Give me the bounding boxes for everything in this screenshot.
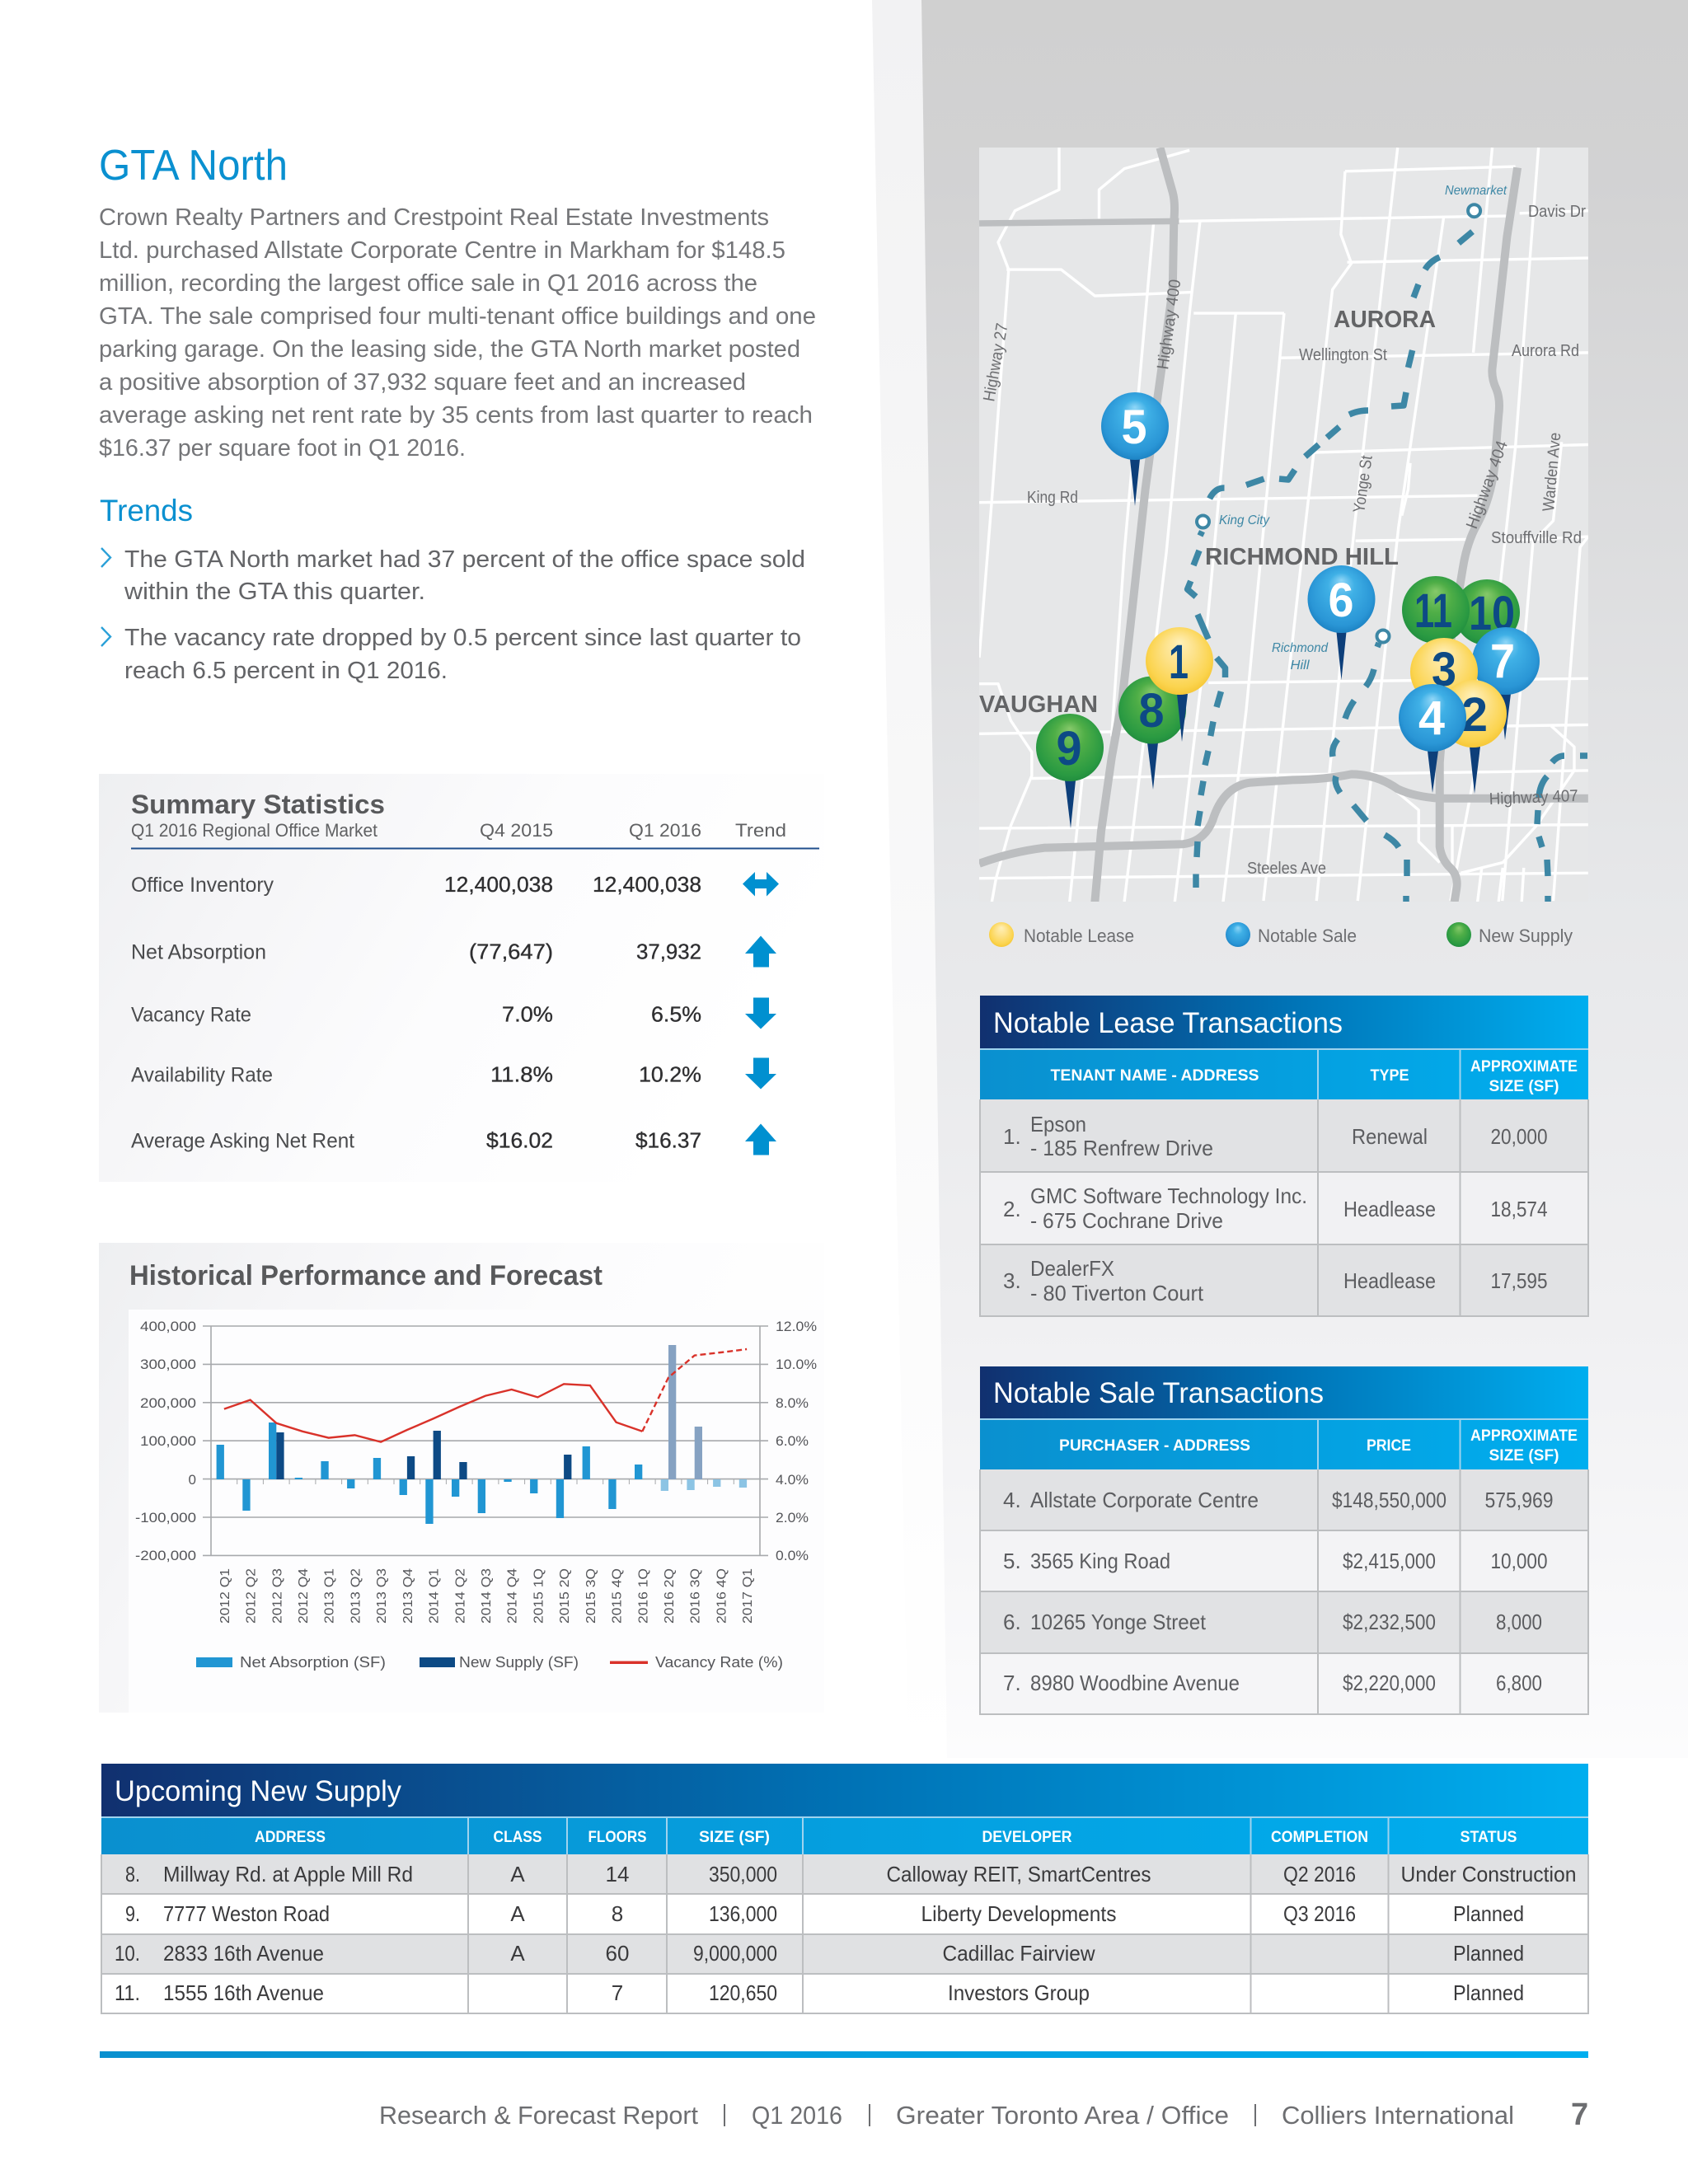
- table rows: Q3 2016: [1283, 1901, 1356, 1926]
- transit line: east: [1537, 756, 1587, 902]
- table header: SIZE (SF): [1489, 1447, 1559, 1465]
- icon: up arrow: [745, 936, 776, 968]
- table title: [101, 1764, 1588, 1817]
- icon: bullet chevron: [101, 627, 110, 646]
- right axis labels: 8.0%: [776, 1395, 809, 1411]
- pin 7: 7: [1490, 635, 1515, 688]
- left axis labels: 100,000: [140, 1433, 196, 1449]
- table rows: 3565 King Road: [1030, 1549, 1170, 1573]
- table header: [101, 1817, 1588, 1854]
- table rows: GMC Software Technology Inc.: [1030, 1183, 1307, 1208]
- table rows: 6,800: [1496, 1671, 1542, 1695]
- table header: CLASS: [493, 1829, 542, 1846]
- left axis labels: -200,000: [135, 1548, 196, 1563]
- table rows: Q2 2016: [1283, 1862, 1356, 1886]
- paragraph: a positive absorption of 37,932 square feet and an increased: [99, 369, 746, 396]
- table header: APPROXIMATE: [1470, 1427, 1578, 1445]
- pin 7: [1472, 627, 1540, 740]
- road labels: Steeles Ave: [1247, 860, 1326, 878]
- table rows: A: [510, 1901, 525, 1926]
- pin 3: 3: [1432, 643, 1456, 696]
- paragraph: parking garage. On the leasing side, the GTA North market posted: [99, 336, 800, 363]
- right axis labels: 0.0%: [776, 1548, 809, 1563]
- paragraph: Crown Realty Partners and Crestpoint Real Estate Investments: [99, 204, 769, 231]
- road labels: Stouffville Rd: [1491, 529, 1582, 547]
- paragraph: average asking net rent rate by 35 cents from last quarter to reach: [99, 402, 813, 429]
- table rows: Millway Rd. at Apple Mill Rd: [163, 1862, 413, 1886]
- table title: Upcoming New Supply: [115, 1775, 401, 1807]
- text block: Trends: [100, 494, 805, 684]
- table rows: $2,415,000: [1343, 1549, 1436, 1573]
- pin 5: [1101, 392, 1169, 506]
- table rows: 20,000: [1490, 1124, 1548, 1149]
- row: Vacancy Rate: Vacancy Rate: [131, 1004, 251, 1027]
- table rows: [980, 1469, 1588, 1714]
- pin 4: [1399, 684, 1466, 793]
- category axis labels: 2016 1Q: [636, 1568, 650, 1624]
- paragraph: $16.37 per square foot in Q1 2016.: [99, 435, 466, 462]
- left axis labels: 200,000: [140, 1395, 196, 1411]
- footer rule: [100, 2051, 1588, 2058]
- table rows: [980, 1099, 1588, 1316]
- region labels: AURORA: [1334, 307, 1436, 333]
- pin 9: 9: [1057, 722, 1081, 776]
- table rows: Renewal: [1352, 1124, 1428, 1149]
- table rows: Planned: [1453, 1980, 1524, 2005]
- local roads: [979, 148, 1588, 902]
- table rows: Planned: [1453, 1901, 1524, 1926]
- pin 8: 8: [1139, 684, 1164, 738]
- row: Average Asking Net Rent: $16.02: [486, 1127, 553, 1152]
- footer: Research & Forecast Report: [379, 2101, 698, 2130]
- paragraph: GTA. The sale comprised four multi-tenant office buildings and one: [99, 303, 816, 330]
- road labels: Highway 400: [1154, 279, 1184, 371]
- bullet text 2: [124, 625, 801, 684]
- pin 10: 10: [1469, 587, 1515, 640]
- chart legend: New Supply (SF): [459, 1654, 579, 1671]
- page number: 7: [1571, 2097, 1588, 2132]
- table rows: 17,595: [1490, 1268, 1548, 1293]
- bullet text 1: [124, 546, 805, 605]
- right axis labels: 6.0%: [776, 1433, 809, 1449]
- row: Net Absorption: 37,932: [636, 940, 701, 964]
- category axis labels: 2013 Q2: [349, 1568, 363, 1624]
- category axis labels: 2012 Q2: [245, 1568, 259, 1624]
- map legend: [989, 922, 1573, 947]
- bullet text 1: within the GTA this quarter.: [124, 579, 425, 605]
- row: Average Asking Net Rent: [131, 1124, 776, 1155]
- row: Net Absorption: (77,647): [469, 940, 553, 964]
- row: Average Asking Net Rent: $16.37: [635, 1127, 701, 1152]
- row: Office Inventory: 12,400,038: [593, 872, 701, 897]
- panel: summary statistics: [99, 774, 824, 1182]
- table rows: Headlease: [1343, 1197, 1436, 1221]
- table header: DEVELOPER: [982, 1829, 1072, 1846]
- town labels: Newmarket: [1445, 184, 1507, 198]
- transit line: Richmond Hill south: [1333, 643, 1407, 902]
- paragraph: million, recording the largest office sale in Q1 2016 across the: [99, 270, 757, 297]
- town labels: King City: [1219, 513, 1270, 527]
- line: vacancy rate forecast: [642, 1349, 747, 1432]
- category axis labels: 2014 Q1: [428, 1568, 442, 1624]
- table rows: Calloway REIT, SmartCentres: [887, 1862, 1151, 1886]
- heading: GTA North: GTA North: [99, 142, 288, 190]
- right axis labels: [776, 1319, 817, 1563]
- pin 1: [1146, 627, 1213, 742]
- row: Office Inventory: Office Inventory: [131, 874, 274, 897]
- table rows: - 675 Cochrane Drive: [1030, 1208, 1223, 1233]
- table title: Notable Lease Transactions: [993, 1007, 1343, 1039]
- table header: PRICE: [1367, 1437, 1411, 1455]
- town labels: [1197, 184, 1507, 673]
- column headers: Trend: [735, 820, 786, 841]
- panel: map: [979, 148, 1588, 902]
- table header: [980, 1049, 1588, 1099]
- table rows: Allstate Corporate Centre: [1030, 1488, 1259, 1512]
- category axis labels: 2015 2Q: [558, 1568, 572, 1624]
- table rows: - 80 Tiverton Court: [1030, 1281, 1204, 1305]
- region labels: RICHMOND HILL: [1205, 544, 1399, 570]
- category axis labels: 2013 Q1: [323, 1568, 337, 1624]
- table rows: $2,232,500: [1343, 1610, 1436, 1634]
- table rows: 8: [612, 1901, 623, 1926]
- table rows: 18,574: [1490, 1197, 1548, 1221]
- region labels: VAUGHAN: [979, 691, 1098, 718]
- table rows: Liberty Developments: [921, 1901, 1116, 1926]
- table rows: 5.: [1003, 1549, 1021, 1573]
- footer: Greater Toronto Area / Office: [896, 2101, 1229, 2130]
- pin 2: 2: [1461, 688, 1488, 742]
- table header: TENANT NAME - ADDRESS: [1050, 1067, 1259, 1085]
- right axis labels: 2.0%: [776, 1510, 809, 1526]
- column headers: Q1 2016 Regional Office Market: [131, 820, 377, 841]
- pin 6: [1307, 565, 1375, 680]
- heading: Trends: Trends: [100, 494, 193, 527]
- table header: FLOORS: [588, 1829, 646, 1846]
- pin 1: 1: [1169, 635, 1189, 689]
- right axis labels: 10.0%: [776, 1357, 817, 1372]
- chart legend: Vacancy Rate (%): [655, 1654, 783, 1671]
- category axis labels: 2013 Q3: [375, 1568, 389, 1624]
- icon: down arrow: [745, 997, 776, 1029]
- table rows: 14: [606, 1862, 629, 1886]
- legend: notable sale: Notable Sale: [1258, 926, 1357, 946]
- paragraph: Ltd. purchased Allstate Corporate Centre in Markham for $148.5: [99, 237, 785, 264]
- table rows: 1.: [1003, 1124, 1021, 1149]
- table header: TYPE: [1370, 1067, 1409, 1085]
- table rows: 7.: [1003, 1671, 1021, 1695]
- table rows: $148,550,000: [1332, 1488, 1447, 1512]
- category axis labels: 2015 3Q: [584, 1568, 598, 1624]
- legend: notable sale: [1226, 922, 1357, 947]
- table: notable sale transactions: [980, 1366, 1588, 1714]
- table rows: 8,000: [1496, 1610, 1542, 1634]
- row: Availability Rate: 10.2%: [639, 1062, 701, 1086]
- icon: double arrow: [743, 872, 779, 897]
- text block: GTA North: [99, 142, 816, 462]
- category axis labels: 2016 3Q: [689, 1568, 703, 1624]
- table rows: DealerFX: [1030, 1256, 1114, 1281]
- chart: bars and line: [203, 1326, 768, 1555]
- line: vacancy rate: [224, 1384, 642, 1442]
- table rows: 60: [606, 1941, 629, 1966]
- table rows: Planned: [1453, 1941, 1524, 1966]
- table header: SIZE (SF): [699, 1829, 770, 1846]
- footer: Q1 2016: [752, 2101, 842, 2130]
- table rows: 8.: [125, 1862, 140, 1886]
- category axis labels: 2012 Q3: [270, 1568, 284, 1624]
- row: Vacancy Rate: 7.0%: [502, 1002, 553, 1027]
- pin 2: [1439, 680, 1507, 794]
- table header: [980, 1419, 1588, 1469]
- table rows: 4.: [1003, 1488, 1021, 1512]
- road labels: Highway 27: [980, 322, 1012, 403]
- table rows: 9,000,000: [693, 1941, 777, 1966]
- pin 11: [1402, 576, 1470, 644]
- table rows: 575,969: [1485, 1488, 1553, 1512]
- row: Net Absorption: [131, 936, 776, 968]
- table rows: 10265 Yonge Street: [1030, 1610, 1207, 1634]
- category axis labels: 2013 Q4: [401, 1568, 415, 1624]
- row: Availability Rate: [131, 1058, 776, 1090]
- row: Availability Rate: 11.8%: [490, 1062, 553, 1086]
- table rows: Epson: [1030, 1112, 1086, 1137]
- row: Office Inventory: [131, 872, 779, 897]
- category axis labels: 2016 2Q: [663, 1568, 677, 1624]
- table rows: Headlease: [1343, 1268, 1436, 1293]
- left axis labels: [135, 1319, 196, 1563]
- table rows: 350,000: [709, 1862, 777, 1886]
- table rows: A: [510, 1941, 525, 1966]
- table rows: $2,220,000: [1343, 1671, 1436, 1695]
- row: Net Absorption: Net Absorption: [131, 941, 266, 964]
- transit line: Newmarket to King City: [1210, 232, 1472, 499]
- pin 9: [1036, 714, 1104, 828]
- table rows: [101, 1854, 1588, 2013]
- table rows: 10,000: [1490, 1549, 1548, 1573]
- left axis labels: 0: [189, 1472, 196, 1488]
- pin 10: [1454, 579, 1520, 645]
- table title: [980, 996, 1588, 1049]
- road labels: [980, 203, 1586, 878]
- table rows: 136,000: [709, 1901, 777, 1926]
- table rows: 9.: [125, 1901, 140, 1926]
- row: Average Asking Net Rent: Average Asking Net Rent: [131, 1129, 354, 1152]
- column headers: Q1 2016: [629, 820, 701, 841]
- pin 5: 5: [1121, 401, 1147, 454]
- table: upcoming new supply: [101, 1764, 1588, 2013]
- footer: Colliers International: [1282, 2101, 1514, 2130]
- region labels: [979, 307, 1436, 718]
- table rows: 6.: [1003, 1610, 1021, 1634]
- category axis labels: 2014 Q3: [480, 1568, 494, 1624]
- bullet text 2: reach 6.5 percent in Q1 2016.: [124, 658, 448, 684]
- road labels: King Rd: [1027, 489, 1078, 507]
- column headers: Q4 2015: [480, 820, 553, 841]
- table rows: 2833 16th Avenue: [163, 1941, 324, 1966]
- left axis labels: 400,000: [140, 1319, 196, 1334]
- road labels: Davis Dr: [1528, 203, 1586, 221]
- category axis labels: 2012 Q1: [218, 1568, 232, 1624]
- icon: down arrow: [745, 1058, 776, 1090]
- pin 6: 6: [1329, 574, 1353, 627]
- table: notable lease transactions: [980, 996, 1588, 1316]
- column headers: [131, 820, 786, 841]
- road labels: Highway 407: [1489, 787, 1578, 808]
- category axis labels: 2016 4Q: [715, 1568, 729, 1624]
- table header: SIZE (SF): [1489, 1078, 1559, 1095]
- chart legend: [196, 1654, 783, 1671]
- table rows: - 185 Renfrew Drive: [1030, 1136, 1213, 1160]
- right axis labels: 12.0%: [776, 1319, 817, 1334]
- pin 3: [1410, 638, 1478, 705]
- table rows: 1555 16th Avenue: [163, 1980, 324, 2005]
- category axis labels: [218, 1568, 755, 1624]
- category axis labels: 2017 Q1: [741, 1568, 755, 1624]
- table rows: 11.: [115, 1980, 140, 2005]
- category axis labels: 2014 Q2: [453, 1568, 467, 1624]
- legend: notable lease: Notable Lease: [1024, 926, 1134, 946]
- category axis labels: 2012 Q4: [297, 1568, 311, 1624]
- heading: Historical Performance and Forecast: Historical Performance and Forecast: [129, 1260, 603, 1291]
- table header: APPROXIMATE: [1470, 1058, 1578, 1076]
- road labels: Warden Ave: [1540, 432, 1564, 512]
- highways: [979, 148, 1588, 902]
- table rows: 8980 Woodbine Avenue: [1030, 1671, 1240, 1695]
- table rows: Investors Group: [948, 1980, 1090, 2005]
- bullet text 1: The GTA North market had 37 percent of the office space sold: [124, 546, 805, 573]
- footer: [379, 2097, 1588, 2132]
- paragraph: [99, 204, 816, 462]
- pin 11: 11: [1414, 584, 1452, 638]
- chart legend: Net Absorption (SF): [240, 1654, 386, 1671]
- heading: Summary Statistics: Summary Statistics: [131, 790, 385, 819]
- row: Availability Rate: Availability Rate: [131, 1063, 273, 1086]
- table header: ADDRESS: [255, 1829, 326, 1846]
- table rows: 2.: [1003, 1197, 1021, 1221]
- legend: notable lease: [989, 922, 1134, 947]
- right axis labels: 4.0%: [776, 1472, 809, 1488]
- pin 8: [1118, 676, 1186, 790]
- icon: up arrow: [745, 1124, 776, 1155]
- town labels: Richmond: [1272, 641, 1329, 655]
- category axis labels: 2014 Q4: [506, 1568, 520, 1624]
- legend: new supply: [1447, 922, 1573, 947]
- row: Vacancy Rate: [131, 997, 776, 1029]
- table rows: 7777 Weston Road: [163, 1901, 330, 1926]
- road labels: Highway 404: [1463, 438, 1512, 532]
- table header: PURCHASER - ADDRESS: [1059, 1437, 1250, 1455]
- left axis labels: 300,000: [140, 1357, 196, 1372]
- panel: historical performance and forecast: [99, 1243, 824, 1713]
- bars: new supply: [276, 1345, 702, 1479]
- road labels: Wellington St: [1299, 346, 1387, 364]
- table title: Notable Sale Transactions: [993, 1377, 1324, 1409]
- bars: net absorption: [217, 1422, 747, 1524]
- table rows: 3.: [1003, 1268, 1021, 1293]
- transit line: King City south: [1188, 532, 1225, 888]
- row: Office Inventory: 12,400,038: [444, 872, 553, 897]
- road labels: Aurora Rd: [1512, 342, 1579, 360]
- table rows: Under Construction: [1401, 1862, 1576, 1886]
- table header: COMPLETION: [1271, 1829, 1368, 1846]
- table header: STATUS: [1461, 1829, 1517, 1846]
- table rows: Cadillac Fairview: [943, 1941, 1095, 1966]
- table rows: 10.: [115, 1941, 140, 1966]
- table rows: 7: [612, 1980, 623, 2005]
- category axis labels: 2015 1Q: [532, 1568, 546, 1624]
- road labels: Yonge St: [1350, 454, 1376, 514]
- row: Vacancy Rate: 6.5%: [651, 1002, 701, 1027]
- town labels: Hill: [1291, 658, 1310, 673]
- icon: bullet chevron: [101, 548, 110, 567]
- table title: [980, 1366, 1588, 1419]
- table rows: 120,650: [709, 1980, 777, 2005]
- category axis labels: 2015 4Q: [611, 1568, 625, 1624]
- legend: new supply: New Supply: [1479, 926, 1573, 946]
- bullet text 2: The vacancy rate dropped by 0.5 percent since last quarter to: [124, 625, 801, 651]
- pin 4: 4: [1418, 691, 1445, 745]
- left axis labels: -100,000: [135, 1510, 196, 1526]
- table rows: A: [510, 1862, 525, 1886]
